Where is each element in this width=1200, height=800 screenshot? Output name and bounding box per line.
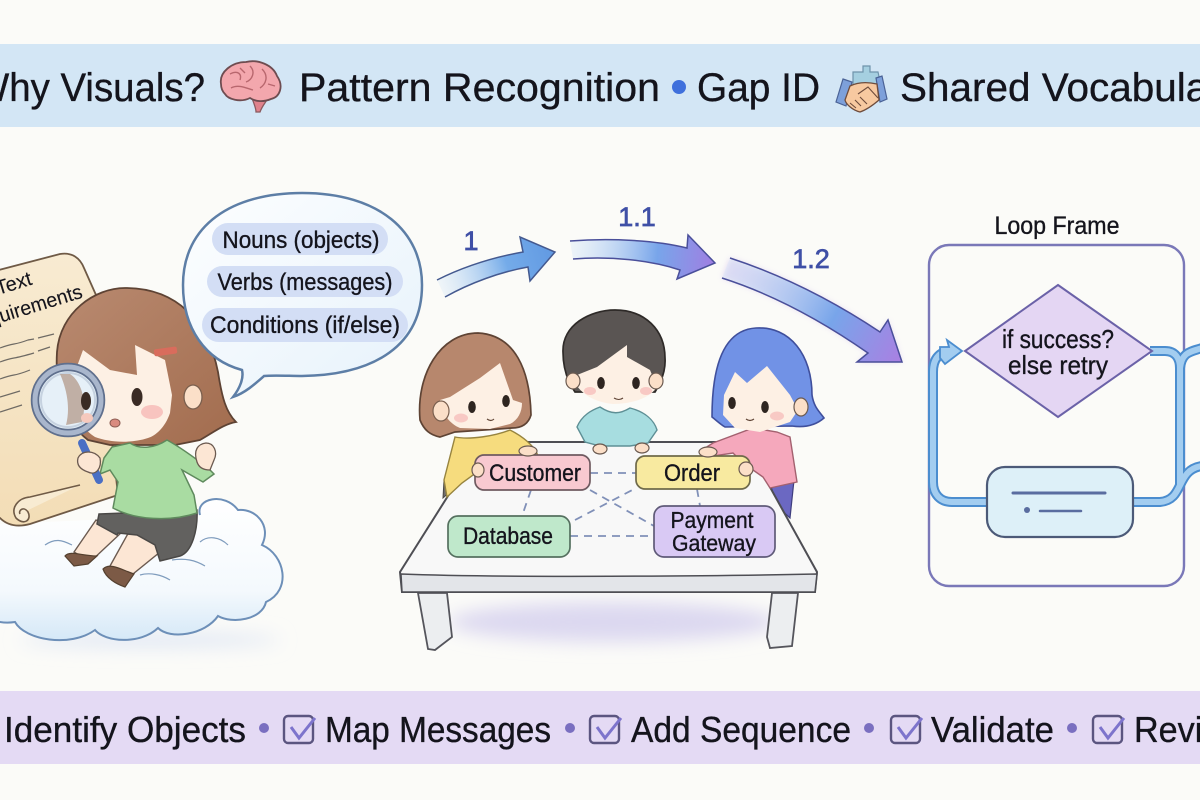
eyes	[468, 395, 510, 413]
decision diamond	[965, 285, 1152, 417]
separator dot	[259, 723, 269, 733]
object cards on table	[448, 446, 775, 557]
left child legs	[443, 478, 458, 498]
barrette	[154, 346, 177, 356]
checkbox icon	[284, 716, 315, 743]
separator dot	[565, 723, 575, 733]
step: validate: Validate	[931, 709, 1054, 750]
banner text: pattern recognition: Pattern Recognition	[299, 66, 660, 110]
step: map messages: Map Messages	[325, 709, 551, 750]
loop frame box	[929, 245, 1184, 586]
smile	[487, 419, 494, 420]
face	[440, 363, 522, 429]
shoes and legs	[65, 520, 165, 587]
card: database: Database	[463, 523, 553, 550]
card: payment gateway	[654, 506, 775, 557]
character: child with magnifying glass	[35, 288, 236, 587]
pill: verbs: Verbs (messages)	[218, 269, 392, 296]
hair back	[57, 288, 236, 445]
card: customer	[475, 455, 590, 490]
table	[400, 442, 817, 650]
eyes	[728, 397, 769, 413]
blush	[584, 387, 652, 395]
pill: conditions: Conditions (if/else)	[210, 312, 400, 339]
checkbox icon	[590, 716, 621, 743]
dashed connections	[522, 473, 700, 536]
step: add sequence: Add Sequence	[631, 709, 851, 750]
separator dot	[672, 80, 686, 94]
separator dot	[864, 723, 874, 733]
loop frame title: Loop Frame	[994, 212, 1120, 240]
hand on handle	[78, 452, 100, 473]
card: payment gateway: Gateway	[672, 530, 756, 556]
step label 1.2: 1.2	[792, 244, 830, 274]
step label 1.1: 1.1	[618, 202, 656, 232]
mouth	[110, 419, 120, 427]
blush	[141, 405, 163, 419]
face	[72, 345, 172, 442]
eye	[132, 388, 142, 406]
face	[572, 345, 657, 404]
yellow sweater	[444, 430, 538, 497]
bottom banner	[0, 691, 1200, 764]
decision diamond: if success?	[1002, 324, 1114, 354]
ear	[794, 398, 808, 416]
separator dot	[1067, 723, 1077, 733]
hands	[593, 443, 649, 454]
hair	[563, 310, 665, 392]
blush	[454, 414, 468, 422]
process box	[987, 467, 1133, 537]
smile	[746, 419, 754, 420]
pill: nouns: Nouns (objects)	[222, 227, 380, 254]
checkbox icon	[891, 716, 922, 743]
loop arrowhead	[940, 340, 962, 364]
speech bubble	[183, 193, 422, 397]
hand waving	[196, 443, 216, 470]
icon: brain	[221, 61, 281, 112]
table shadow	[448, 602, 778, 642]
shorts	[97, 510, 197, 561]
card: order: Order	[664, 460, 720, 487]
eyes	[597, 377, 640, 389]
character: left child	[420, 333, 538, 497]
face	[723, 366, 798, 432]
ears	[566, 373, 663, 389]
green sweater	[100, 440, 214, 519]
right child pants	[770, 480, 794, 518]
cloud	[0, 499, 283, 647]
card: payment gateway: Payment	[670, 507, 754, 533]
icon: handshake	[836, 66, 887, 112]
arrow 1	[437, 226, 555, 297]
checkbox icon	[1093, 716, 1124, 743]
card: database	[448, 516, 570, 557]
ear	[433, 401, 449, 421]
loop frame	[929, 212, 1200, 586]
hair	[420, 333, 531, 437]
table legs	[418, 593, 798, 650]
decision diamond: else retry	[1008, 350, 1108, 380]
ear	[184, 385, 202, 409]
character: middle child	[563, 310, 665, 454]
tabletop	[400, 442, 817, 592]
banner text: gap id: Gap ID	[697, 66, 820, 110]
flow pipes	[933, 348, 1200, 502]
magnifying glass	[35, 367, 101, 480]
card: order	[636, 456, 750, 489]
teal sweater	[577, 407, 657, 446]
pink sweater	[702, 428, 797, 488]
hair	[712, 328, 824, 427]
smile	[614, 398, 623, 400]
blush	[770, 412, 784, 420]
hands on cards	[472, 446, 753, 477]
arrow 1.1	[570, 202, 715, 279]
card: customer: Customer	[489, 460, 581, 487]
step label 1: 1	[463, 226, 479, 256]
top banner	[0, 44, 1200, 127]
arrow 1.2	[722, 244, 902, 362]
character: right child	[702, 328, 824, 488]
step: identify objects: Identify Objects	[4, 709, 246, 750]
scroll: text requirements	[0, 254, 118, 526]
